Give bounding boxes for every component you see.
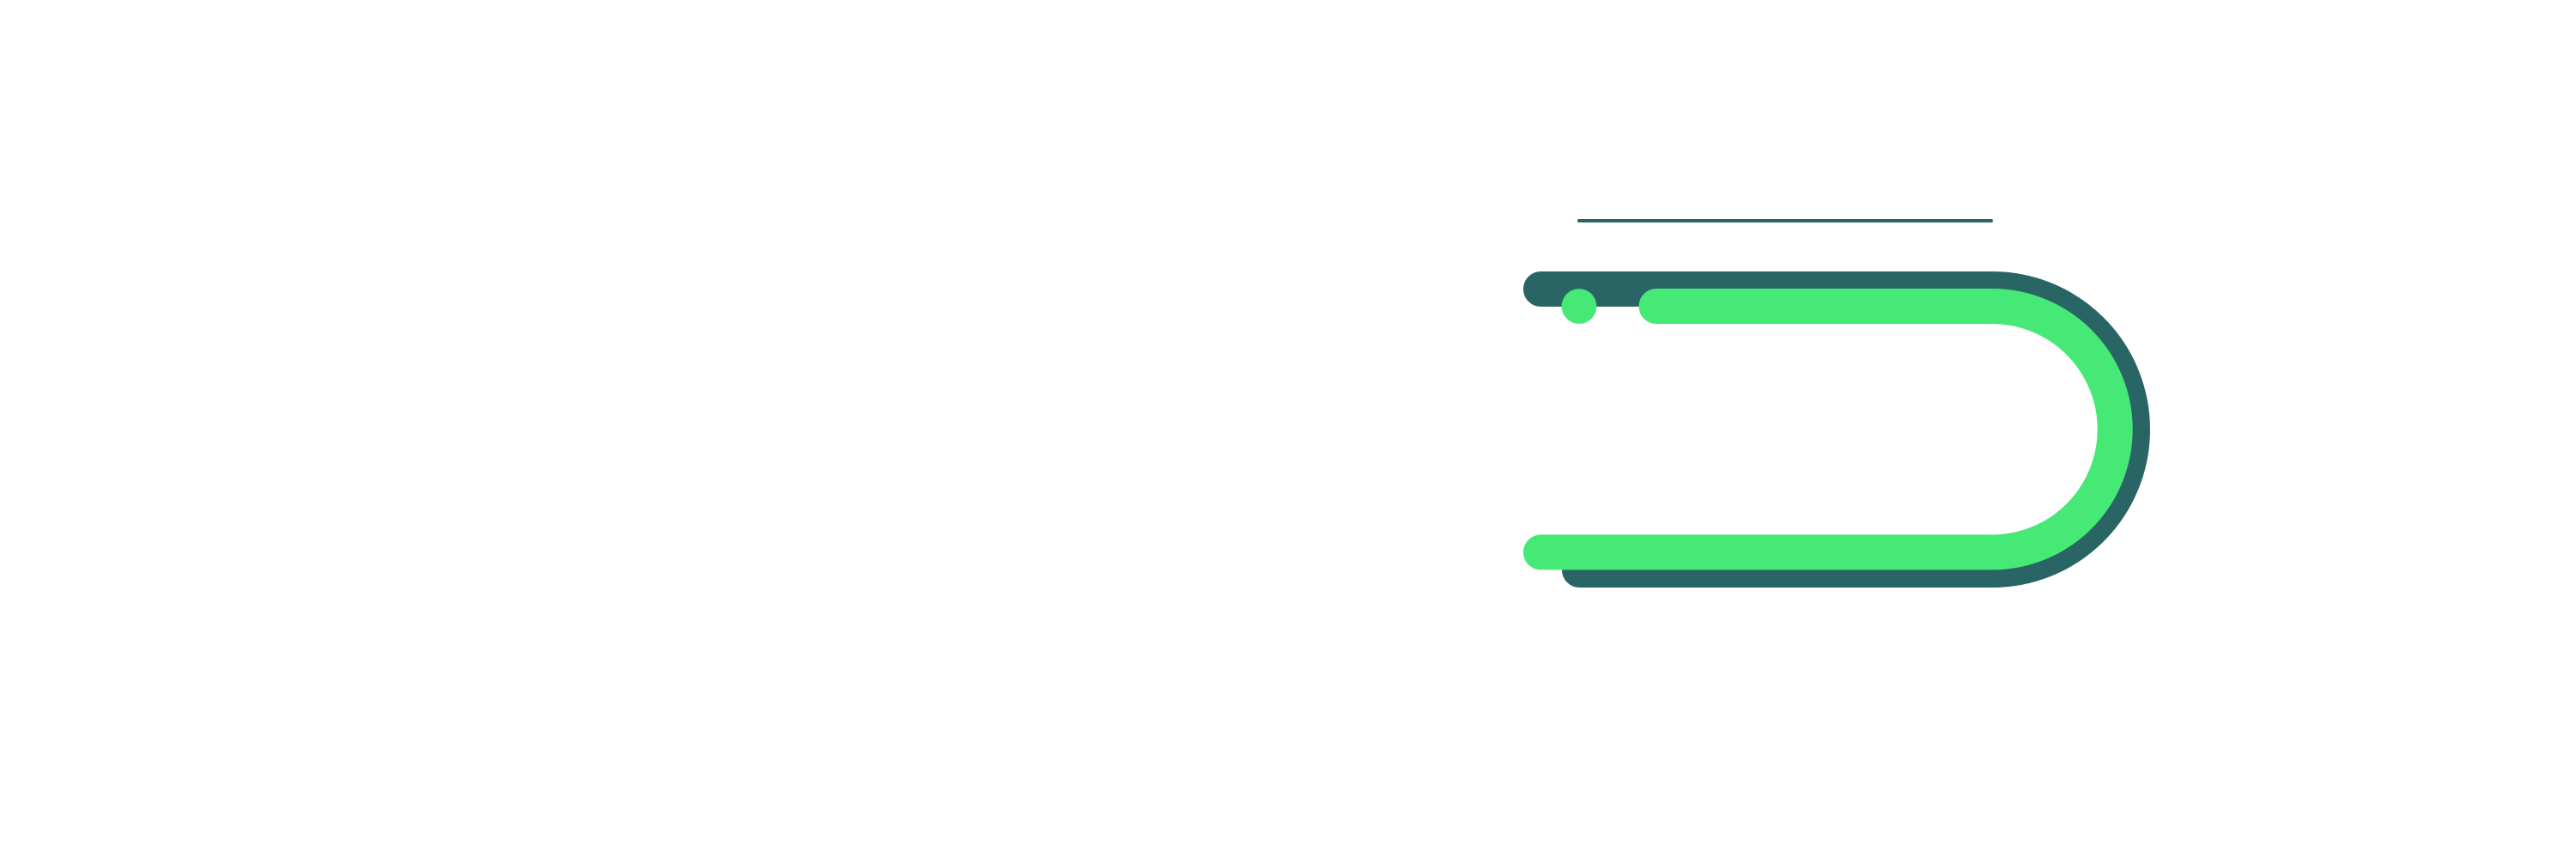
thin top line	[1579, 219, 1991, 222]
green dot	[1562, 289, 1596, 324]
green track segment	[1540, 306, 2115, 552]
dark teal track	[1540, 289, 2133, 570]
